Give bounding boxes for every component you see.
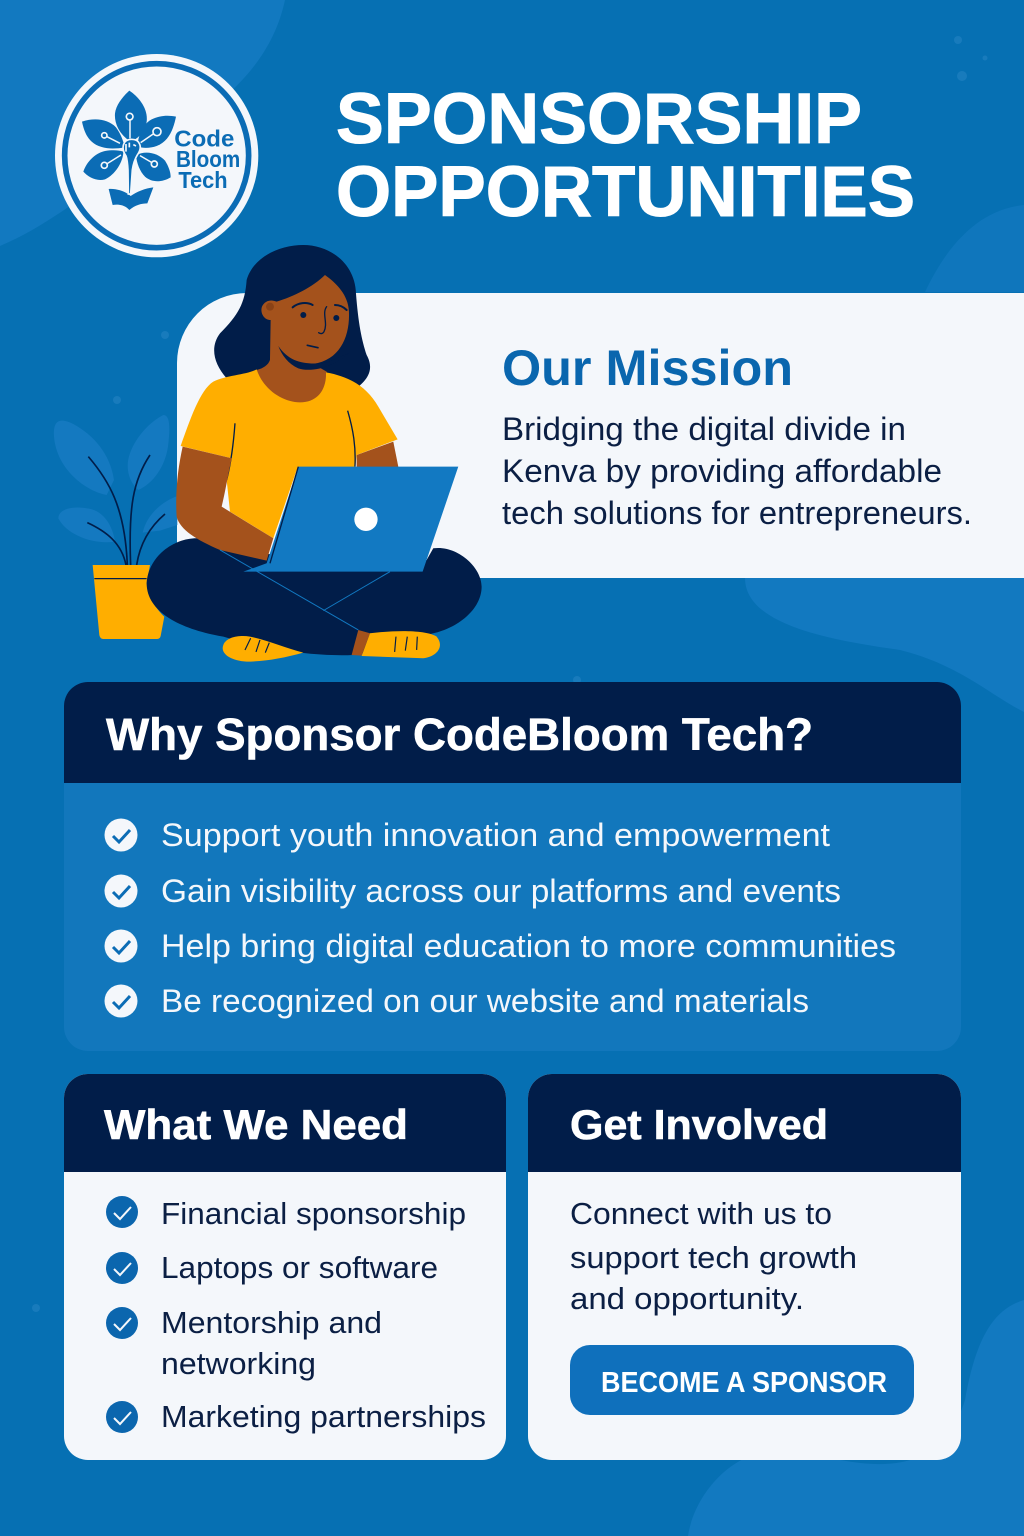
button: become a sponsor: [570, 1345, 914, 1415]
checklist: what we need: networking: [161, 1346, 316, 1381]
title: SPONSORSHIP: [336, 80, 862, 159]
logo: [55, 54, 258, 257]
title: OPPORTUNITIES: [336, 153, 915, 232]
checklist: what we need: Financial sponsorship: [161, 1196, 466, 1231]
panel: our mission: [177, 293, 1024, 578]
mission text: Kenva by providing affordable: [502, 453, 942, 489]
checklist: why sponsor: Support youth innovation and empowerment: [161, 817, 830, 853]
logo wordmark: Tech: [178, 167, 228, 193]
panel header: get involved: [528, 1074, 961, 1172]
panel: why sponsor: [64, 682, 961, 1051]
panel header: why sponsor: Why Sponsor CodeBloom Tech?: [106, 709, 813, 760]
icon: flower: [82, 91, 176, 210]
checklist: why sponsor: Be recognized on our website and materials: [161, 983, 809, 1019]
logo wordmark: Code: [174, 125, 234, 151]
illustration: potted plant: [54, 415, 177, 639]
mission text: [502, 411, 972, 531]
panel header: get involved: Get Involved: [570, 1101, 828, 1148]
panel: what we need: [64, 1074, 506, 1460]
get involved text: support tech growth: [570, 1240, 857, 1275]
mission text: tech solutions for entrepreneurs.: [502, 495, 972, 531]
panel: get involved: [528, 1074, 961, 1460]
checklist: why sponsor: Help bring digital education to more communities: [161, 928, 896, 964]
get involved text: [570, 1196, 857, 1316]
get involved text: Connect with us to: [570, 1196, 832, 1231]
mission text: Bridging the digital divide in: [502, 411, 906, 447]
checklist: what we need: Marketing partnerships: [161, 1399, 486, 1434]
panel header: what we need: [64, 1074, 506, 1172]
checklist: what we need: Laptops or software: [161, 1250, 438, 1285]
checklist: why sponsor: [104, 817, 896, 1019]
logo wordmark: [174, 125, 240, 193]
panel header: why sponsor: [64, 682, 961, 783]
checklist: what we need: Mentorship and: [161, 1305, 382, 1340]
panel header: what we need: What We Need: [104, 1101, 408, 1148]
button: become a sponsor: BECOME A SPONSOR: [601, 1367, 887, 1399]
checklist: why sponsor: Gain visibility across our platforms and events: [161, 873, 841, 909]
get involved text: and opportunity.: [570, 1281, 804, 1316]
checklist: what we need: [106, 1196, 486, 1434]
illustration: woman with laptop: [147, 245, 482, 662]
title: [336, 80, 915, 232]
heading: our mission: Our Mission: [502, 340, 793, 396]
logo wordmark: Bloom: [176, 146, 240, 172]
